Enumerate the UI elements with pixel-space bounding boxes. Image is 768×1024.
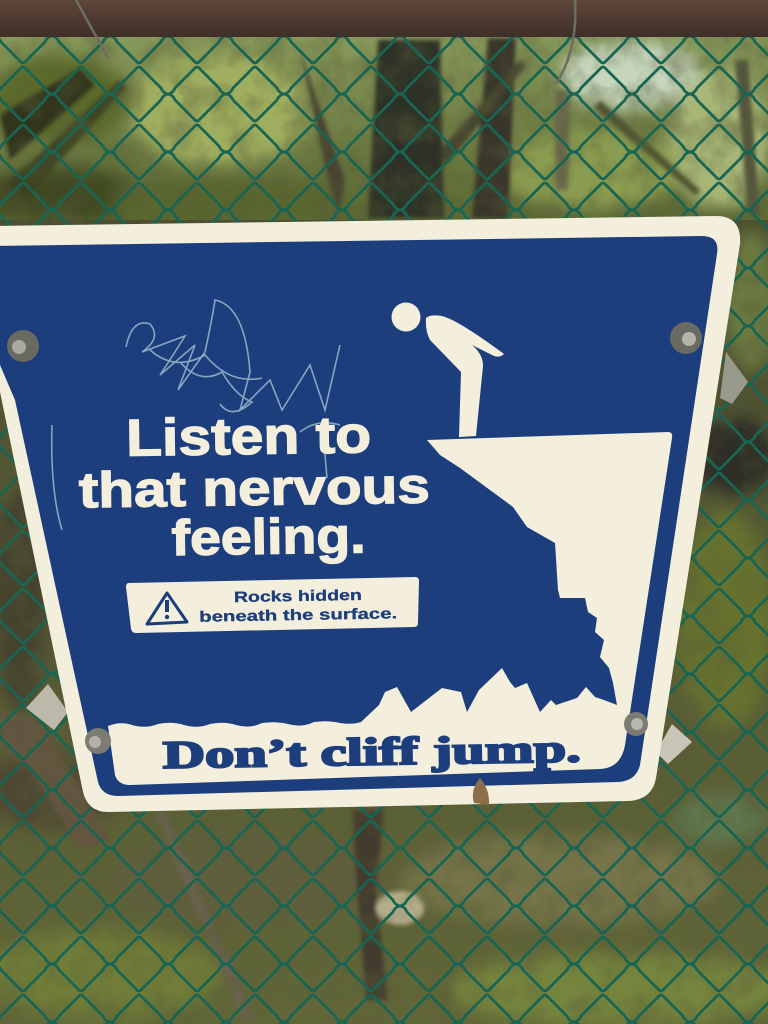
bolts: [7, 322, 702, 754]
forest background: [0, 36, 768, 236]
sign panel: [0, 216, 740, 812]
note text: beneath the surface.: [199, 605, 397, 626]
icon: warning triangle: [147, 593, 187, 624]
headline: that nervous: [78, 457, 430, 518]
note text: [199, 586, 397, 626]
footer slogan: Don’t cliff jump.: [162, 727, 581, 777]
note text: Rocks hidden: [234, 587, 362, 606]
headline: [78, 405, 431, 567]
sign mounting clips: [26, 352, 748, 764]
rusty top rail: [0, 0, 768, 37]
sign blue field: [0, 236, 717, 796]
tree trunks: [0, 38, 760, 218]
dead leaf on sign: [473, 778, 489, 805]
cliff and water illustration: [108, 432, 672, 785]
ground and moss background: [0, 220, 768, 1024]
graffiti scribble: [52, 300, 340, 530]
headline: feeling.: [171, 507, 366, 566]
headline: Listen to: [126, 406, 372, 468]
diver figure looking over the edge: [392, 302, 504, 437]
branches and rock: [0, 712, 424, 1020]
wire ties on rail: [76, 0, 575, 84]
warning note box: [126, 577, 419, 633]
sign cream backing: [0, 216, 740, 812]
